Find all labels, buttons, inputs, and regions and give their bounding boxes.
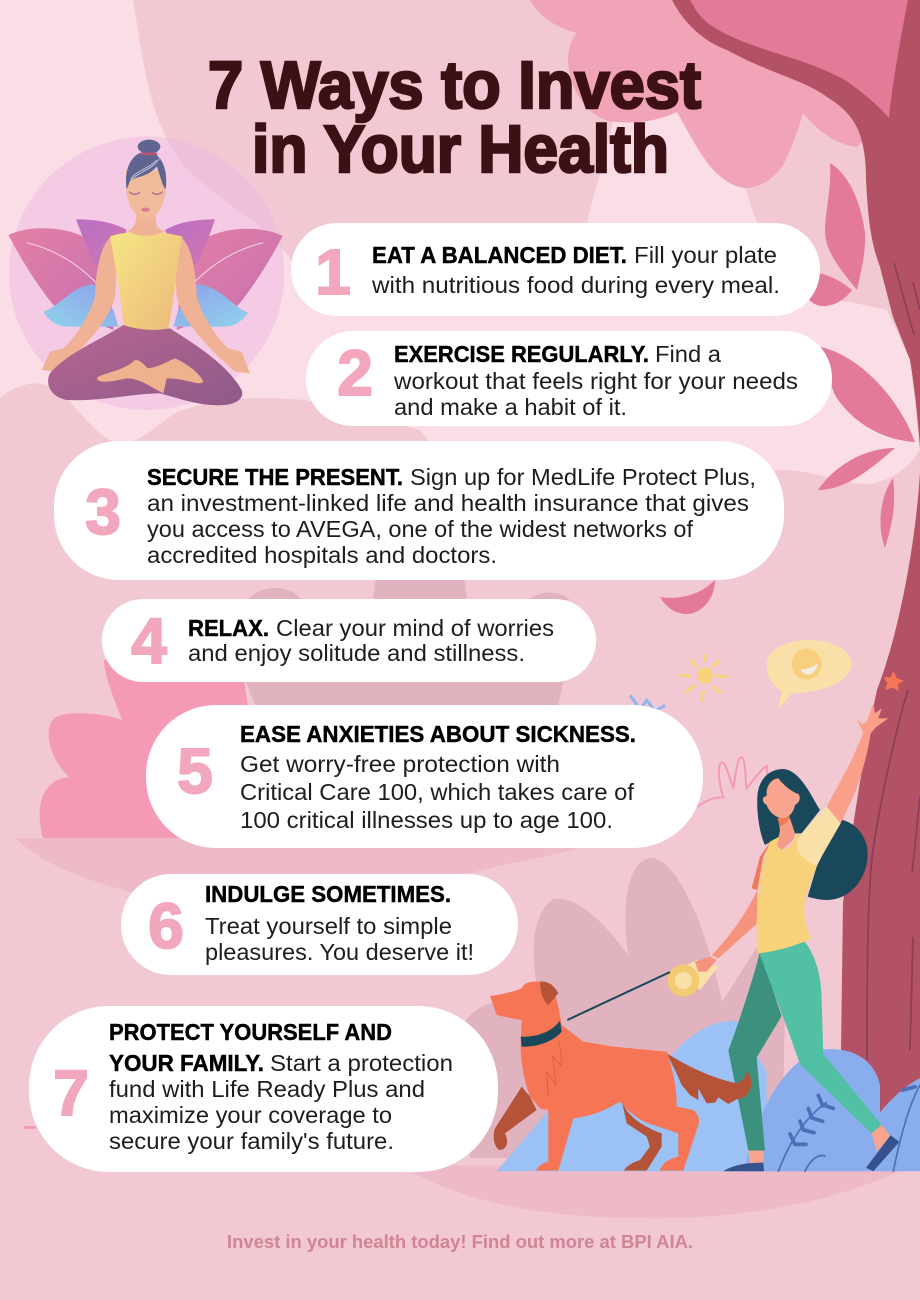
star xyxy=(883,671,904,691)
step 3 text: accredited hospitals and doctors. xyxy=(147,542,497,568)
step 6 text: Treat yourself to simple xyxy=(205,913,452,939)
step 5 text: EASE ANXIETIES ABOUT SICKNESS. xyxy=(240,721,636,747)
step 7 text: secure your family's future. xyxy=(109,1128,394,1154)
panel: step 2 xyxy=(306,331,832,426)
number 4: 4 xyxy=(131,605,167,677)
step 5 text: Critical Care 100, which takes care of xyxy=(240,779,635,805)
leash reel xyxy=(667,957,718,997)
number 7: 7 xyxy=(53,1057,89,1129)
step 1 text: EAT A BALANCED DIET. xyxy=(372,242,627,268)
title: in Your Health xyxy=(252,112,669,187)
step 6 text xyxy=(205,881,474,965)
panel: step 4 xyxy=(102,599,596,682)
step 2 text: and make a habit of it. xyxy=(394,394,627,420)
step 3 text: Sign up for MedLife Protect Plus, xyxy=(410,464,756,490)
neck and face xyxy=(763,778,800,850)
step 5 text: Get worry-free protection with xyxy=(240,751,560,777)
title: 7 Ways to Invest xyxy=(208,48,701,123)
step 4 text xyxy=(188,615,554,666)
speech bubble xyxy=(767,640,852,711)
step 4 text: RELAX. xyxy=(188,615,269,641)
illustration: doodles and bushes xyxy=(497,640,920,1171)
illustration: dog and leash xyxy=(490,957,751,1171)
number 3: 3 xyxy=(85,476,121,548)
step 7 text: PROTECT YOURSELF AND xyxy=(109,1019,392,1045)
step 3 text xyxy=(147,464,756,568)
step 4 text: Clear your mind of worries xyxy=(276,615,554,641)
step 7 text: fund with Life Ready Plus and xyxy=(109,1076,425,1102)
dog tail xyxy=(667,1053,751,1104)
blue doodle xyxy=(630,695,665,711)
panel: step 1 xyxy=(291,223,820,316)
step 6 text: INDULGE SOMETIMES. xyxy=(205,881,451,907)
step 1 text: Fill your plate xyxy=(634,242,777,268)
step 3 text: SECURE THE PRESENT. xyxy=(147,464,403,490)
dog collar xyxy=(521,1021,562,1047)
step 5 text: 100 critical illnesses up to age 100. xyxy=(240,807,613,833)
step 3 text: an investment-linked life and health insurance that gives xyxy=(147,490,749,516)
panel: step 7 xyxy=(29,1006,498,1172)
tree xyxy=(672,0,920,1170)
leaves xyxy=(660,163,915,614)
number 5: 5 xyxy=(177,735,213,807)
step 2 text: EXERCISE REGULARLY. xyxy=(394,341,649,367)
strap and lower arm xyxy=(712,840,772,958)
step 4 text: and enjoy solitude and stillness. xyxy=(188,640,525,666)
step 7 text: Start a protection xyxy=(270,1050,453,1076)
footer call to action: Invest in your health today! Find out more at BPI AIA. xyxy=(227,1232,693,1252)
number 2: 2 xyxy=(337,337,373,409)
background plants xyxy=(24,560,785,1158)
dog fur line xyxy=(547,1042,561,1097)
dog ear xyxy=(540,982,558,1005)
legs xyxy=(723,942,899,1171)
panel: step 3 xyxy=(54,441,784,580)
number 6: 6 xyxy=(148,890,184,962)
pink doodle xyxy=(697,757,767,807)
title xyxy=(208,48,701,187)
step 7 text xyxy=(109,1019,453,1154)
panel: step 5 xyxy=(146,705,703,848)
step 7 text: YOUR FAMILY. xyxy=(109,1050,264,1076)
sun doodle xyxy=(681,656,726,700)
leash xyxy=(567,972,670,1020)
step 1 text xyxy=(371,242,780,298)
step 2 text: Find a xyxy=(655,341,721,367)
foreground sprigs xyxy=(778,1085,920,1171)
step 7 text: maximize your coverage to xyxy=(109,1102,392,1128)
dog body xyxy=(490,981,699,1171)
dark legs xyxy=(494,1087,662,1171)
hair xyxy=(757,769,868,900)
raised arm xyxy=(827,703,888,823)
shirt xyxy=(757,833,817,953)
ground blob, middle xyxy=(15,838,600,892)
illustration: woman upper body xyxy=(697,703,888,958)
step 3 text: you access to AVEGA, one of the widest networks of xyxy=(147,516,694,542)
step 2 text: workout that feels right for your needs xyxy=(393,368,798,394)
step 6 text: pleasures. You deserve it! xyxy=(205,939,474,965)
panel: step 6 xyxy=(121,874,518,975)
illustration: meditating woman xyxy=(8,137,284,410)
blue bushes xyxy=(497,1021,920,1171)
step 5 text xyxy=(240,721,636,833)
step 2 text xyxy=(393,341,798,420)
number 1: 1 xyxy=(315,236,351,308)
sleeve xyxy=(797,807,841,865)
step 1 text: with nutritious food during every meal. xyxy=(371,272,780,298)
